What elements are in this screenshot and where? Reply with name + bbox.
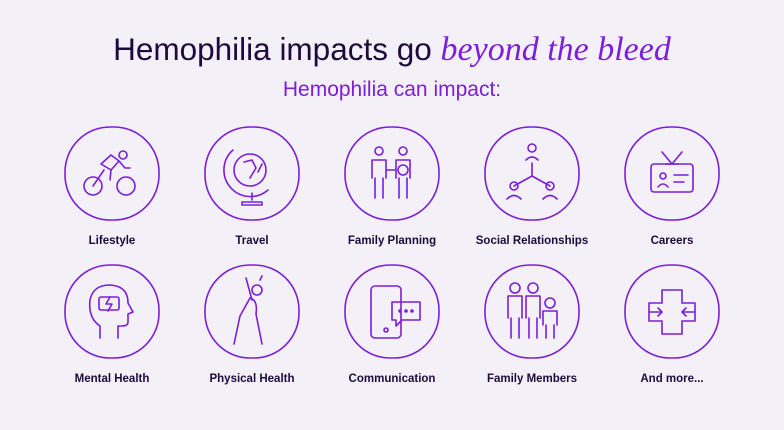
label: and more: And more... bbox=[640, 373, 704, 385]
icon: mental health bbox=[65, 265, 159, 358]
label: communication: Communication bbox=[349, 373, 435, 385]
label: careers: Careers bbox=[651, 235, 693, 247]
icon: lifestyle bbox=[65, 127, 159, 220]
icon: communication bbox=[345, 265, 439, 358]
icon: family members bbox=[485, 265, 579, 358]
icon: and more bbox=[625, 265, 719, 358]
label: lifestyle: Lifestyle bbox=[89, 235, 135, 247]
icon: family planning bbox=[345, 127, 439, 220]
label: family members: Family Members bbox=[487, 373, 577, 385]
icon: physical health bbox=[205, 265, 299, 358]
label: family planning: Family Planning bbox=[348, 235, 436, 247]
label: mental health: Mental Health bbox=[75, 373, 149, 385]
label: physical health: Physical Health bbox=[209, 373, 295, 385]
icon: social relationships bbox=[485, 127, 579, 220]
title: Hemophilia impacts go beyond the bleed bbox=[113, 31, 672, 68]
icon: careers bbox=[625, 127, 719, 220]
label: social relationships: Social Relationships bbox=[476, 235, 588, 247]
subtitle: Hemophilia can impact: bbox=[283, 78, 501, 101]
icon: travel bbox=[205, 127, 299, 220]
label: travel: Travel bbox=[235, 235, 269, 247]
